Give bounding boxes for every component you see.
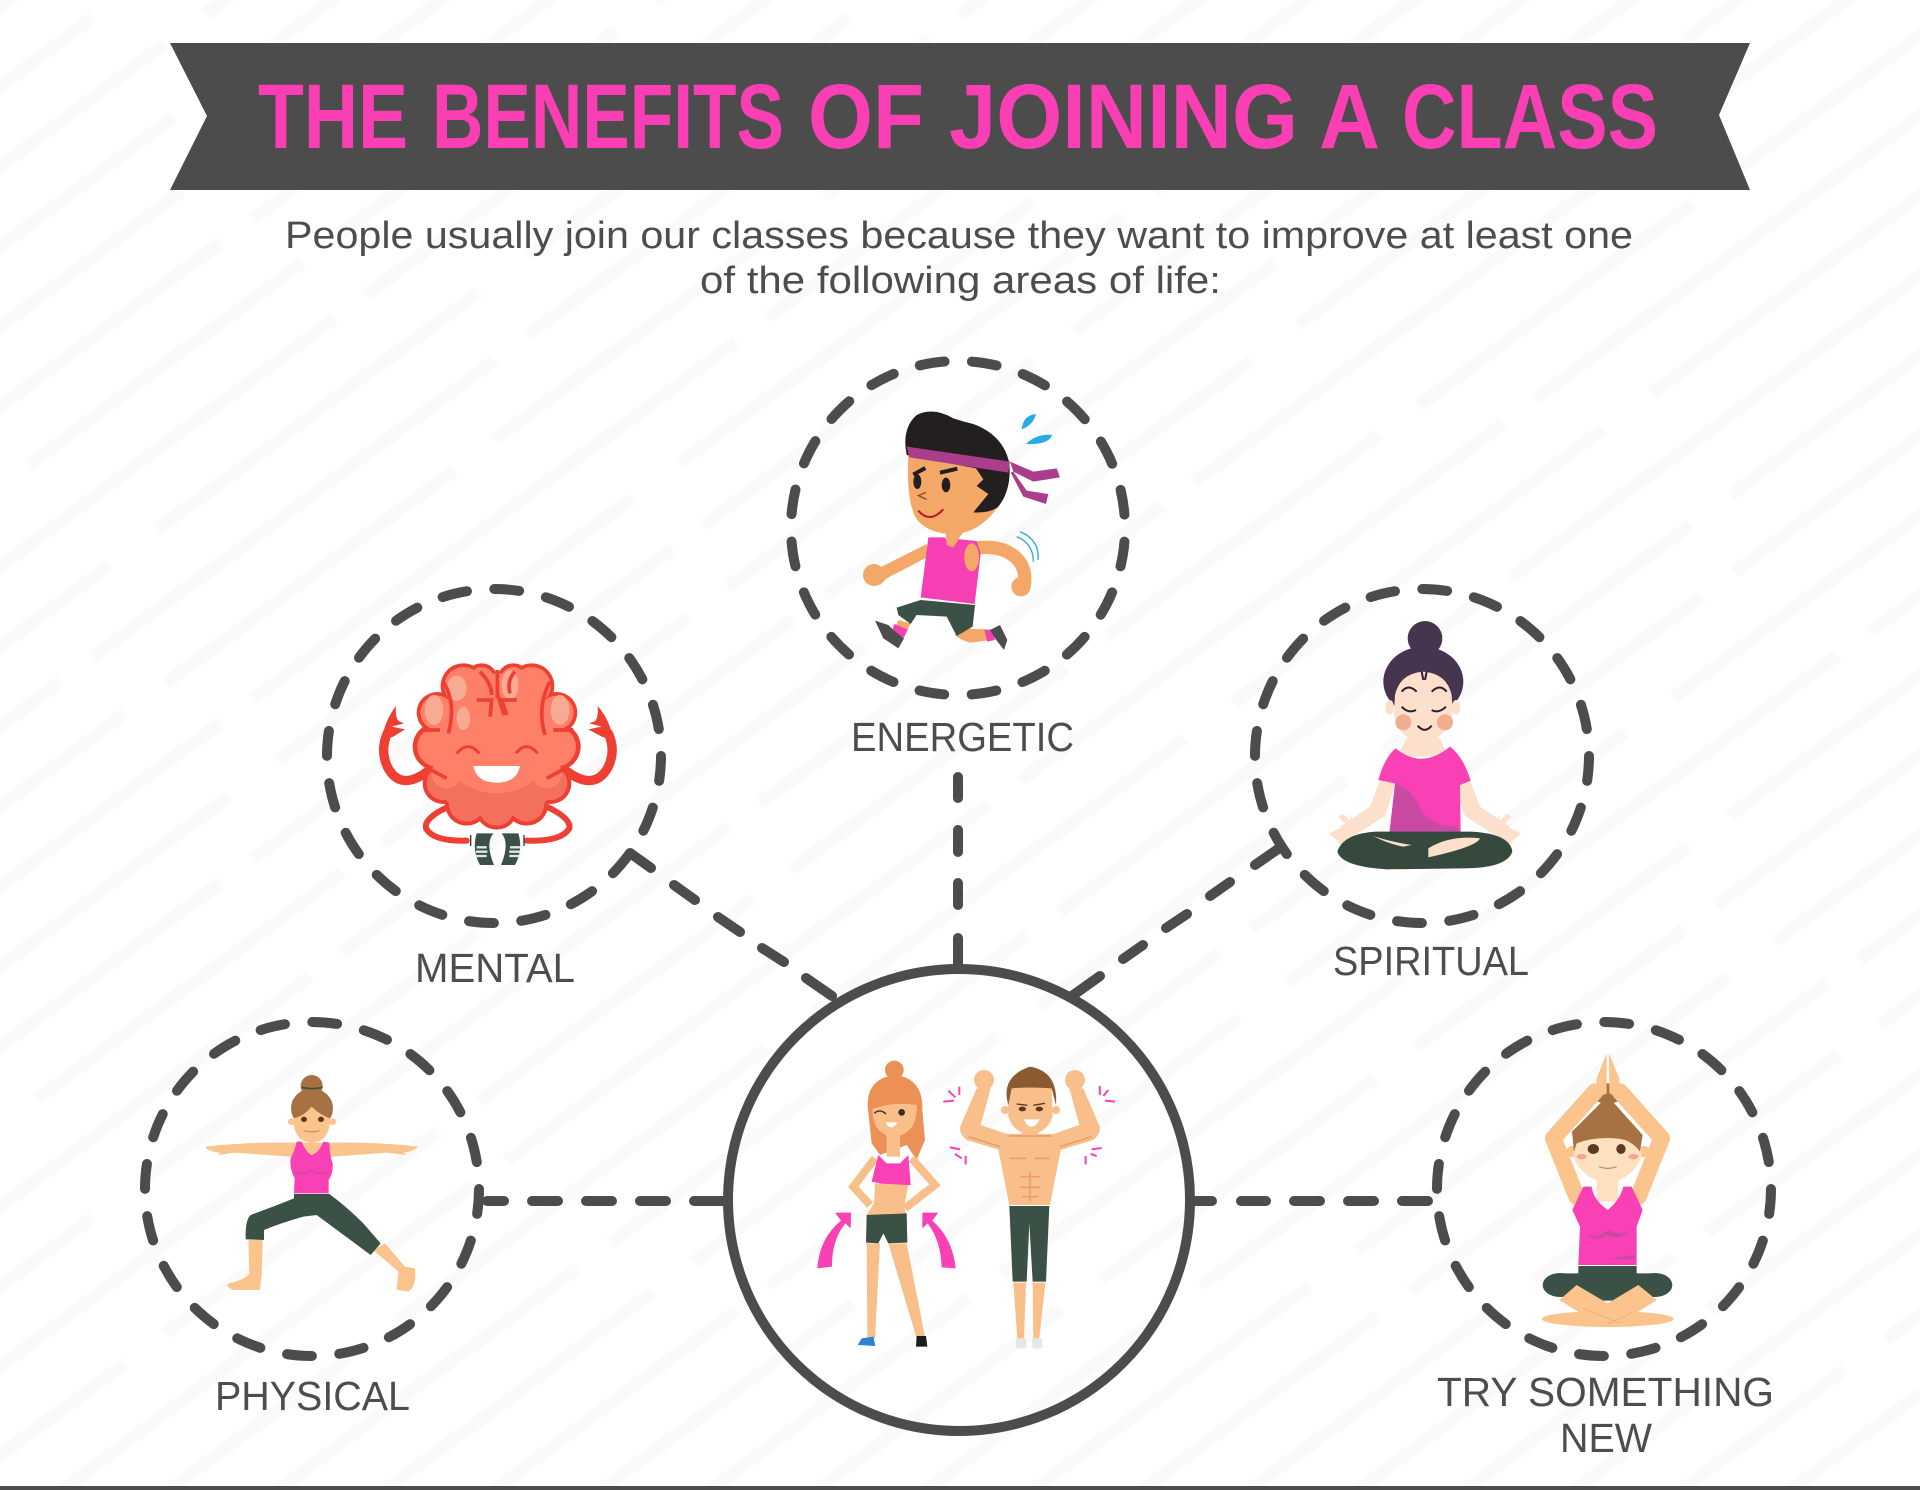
label: try something new (1437, 1369, 1774, 1461)
title (258, 66, 1658, 168)
title banner (170, 43, 1750, 190)
label: spiritual: SPIRITUAL (1333, 938, 1529, 984)
title: A (1319, 66, 1380, 168)
dashed circle: mental (327, 589, 661, 923)
icon: female and male figures (817, 1061, 1115, 1348)
subtitle text (285, 215, 1633, 302)
dashed circle: physical (145, 1022, 479, 1356)
label: try something new: NEW (1560, 1415, 1652, 1461)
central circle (728, 969, 1190, 1431)
subtitle text: People usually join our classes because they want to improve at least one (285, 215, 1633, 257)
subtitle text: of the following areas of life: (700, 260, 1221, 302)
dashed connectors (487, 777, 1428, 1201)
label: mental: MENTAL (415, 945, 575, 991)
dashed circle: spiritual (1255, 589, 1589, 923)
label: physical: PHYSICAL (215, 1373, 410, 1419)
title: BENEFITS (432, 66, 784, 168)
title: CLASS (1402, 66, 1658, 168)
icon: running boy (863, 412, 1060, 650)
icon: seated yoga woman (1542, 1053, 1674, 1327)
icon: pink arrows (817, 1213, 956, 1268)
title: JOINING (949, 66, 1298, 168)
label: try something new: TRY SOMETHING (1437, 1369, 1774, 1415)
icon: smiling brain (382, 663, 613, 865)
icon: meditating woman (1329, 621, 1521, 869)
dashed circle: try something new (1437, 1022, 1771, 1356)
title: THE (258, 66, 408, 168)
title: OF (808, 66, 924, 168)
icon: male figure (943, 1067, 1115, 1348)
dashed circle: energetic (778, 348, 1138, 708)
label: energetic: ENERGETIC (851, 714, 1074, 760)
icon: warrior pose woman (205, 1075, 418, 1292)
